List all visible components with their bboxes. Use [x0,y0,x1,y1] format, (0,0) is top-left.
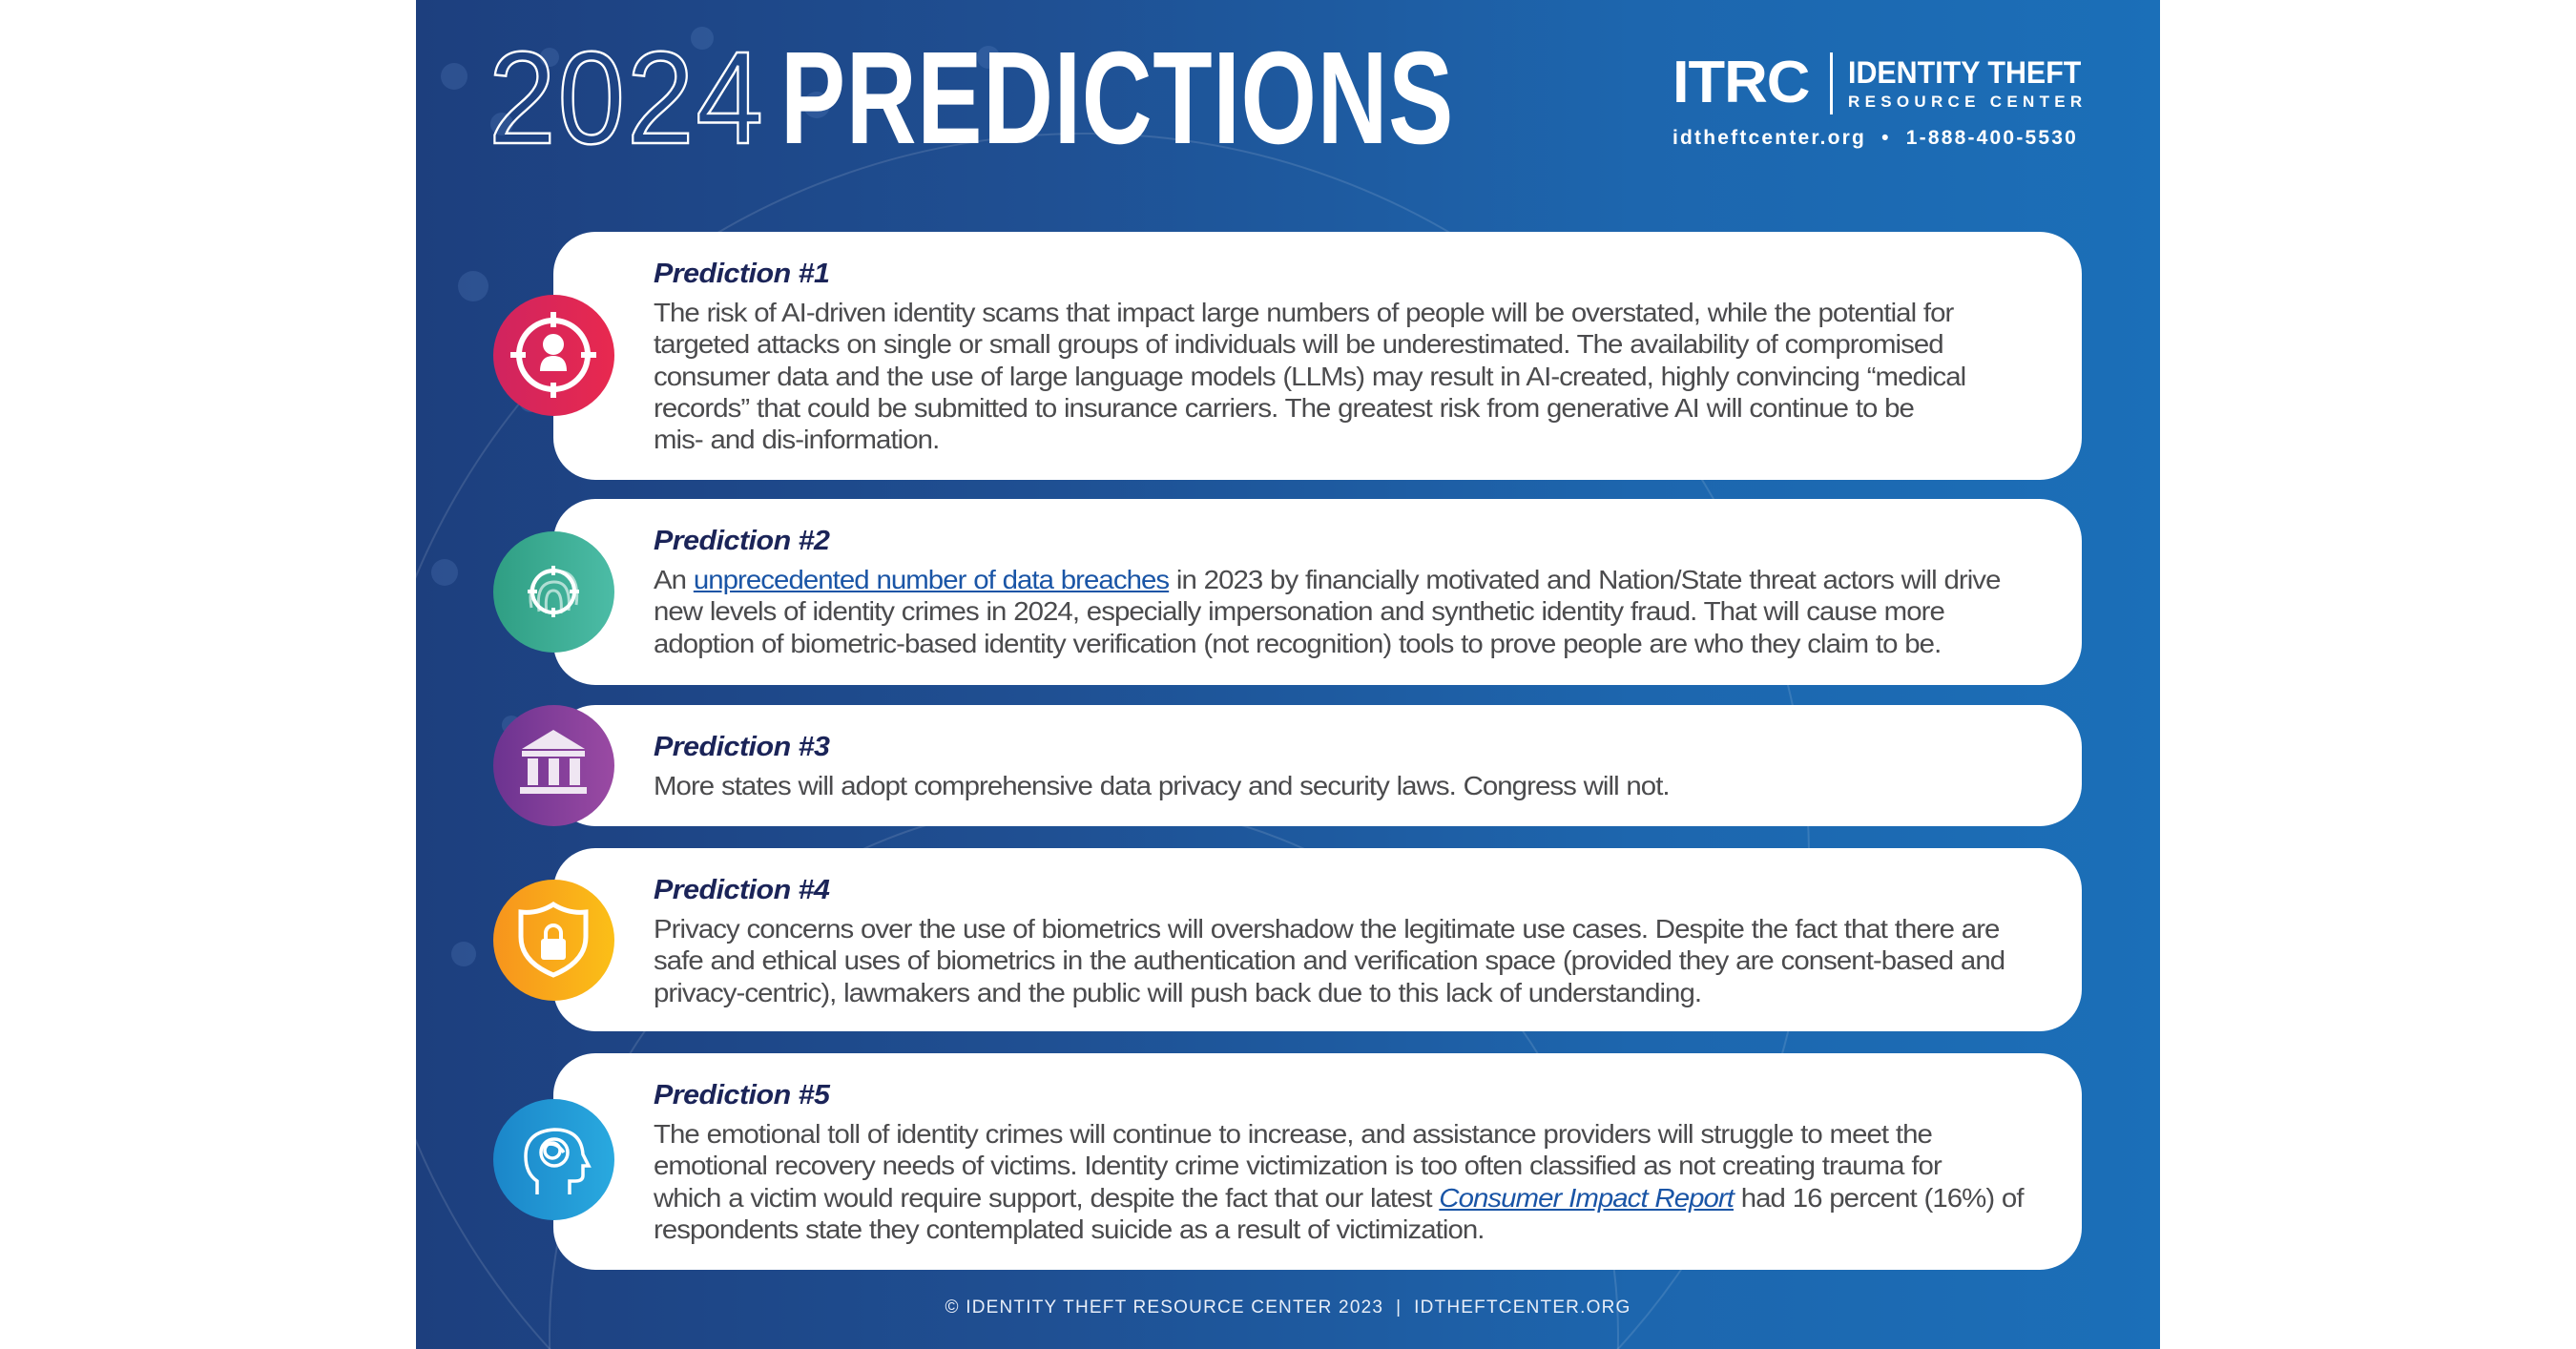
footer: © IDENTITY THEFT RESOURCE CENTER 2023 | IDTHEFTCENTER.ORG [945,1297,1631,1318]
card 5: respondents state they contemplated suicide as a result of victimization. [654,1214,1484,1244]
logo [1672,50,2087,149]
logo: ITRC [1672,50,1809,115]
card 1 [553,232,2082,480]
card 3: Prediction #3 [654,732,829,762]
card 1: Prediction #1 [654,259,829,289]
card 1: targeted attacks on single or small groups of individuals will be underestimated. The availability of compromised [654,329,1943,359]
icon: fingerprint [493,531,614,653]
card 4: Prediction #4 [654,875,829,905]
logo: RESOURCE CENTER [1848,93,2087,111]
icon: government building [493,705,614,826]
card 5 [553,1053,2082,1270]
card 1: records” that could be submitted to insurance carriers. The greatest risk from generative AI will continue to be [654,393,1914,423]
icon: head [493,1099,614,1220]
card 2 [553,499,2082,685]
logo: idtheftcenter.org • 1-888-400-5530 [1672,127,2078,149]
card 5: Prediction #5 [654,1080,829,1110]
card 5: emotional recovery needs of victims. Identity crime victimization is too often classified as not creating trauma for [654,1151,1942,1180]
card 1: consumer data and the use of large language models (LLMs) may result in AI-created, highly convincing “medical [654,362,1965,391]
card 4 [553,848,2082,1031]
card 2: adoption of biometric-based identity verification (not recognition) tools to prove people are who they claim to be. [654,629,1941,658]
card 4: safe and ethical uses of biometrics in the authentication and verification space (provided they are consent-based and [654,945,2005,975]
icon: target people [493,295,614,416]
card 1: mis- and dis-information. [654,425,939,454]
card 1: The risk of AI-driven identity scams that impact large numbers of people will be overstated, while the potential for [654,298,1953,327]
card 4: privacy-centric), lawmakers and the public will push back due to this lack of understanding. [654,978,1701,1007]
icon: shield lock [493,880,614,1001]
card 4: Privacy concerns over the use of biometrics will overshadow the legitimate use cases. Despite the fact that there are [654,914,1999,944]
card 5: which a victim would require support, despite the fact that our latest Consumer Impact Report had 16 percent (16%) of [654,1183,2024,1213]
logo: IDENTITY THEFT [1848,55,2081,90]
card 2: new levels of identity crimes in 2024, especially impersonation and synthetic identity fraud. That will cause more [654,596,1944,626]
card 3: More states will adopt comprehensive data privacy and security laws. Congress will not. [654,771,1670,800]
background panel [416,0,2160,1349]
card 5: The emotional toll of identity crimes will continue to increase, and assistance providers will struggle to meet the [654,1119,1932,1149]
card 2: Prediction #2 [654,526,829,556]
card 2: An unprecedented number of data breaches in 2023 by financially motivated and Nation/State threat actors will drive [654,565,2000,594]
card 3 [553,705,2082,826]
